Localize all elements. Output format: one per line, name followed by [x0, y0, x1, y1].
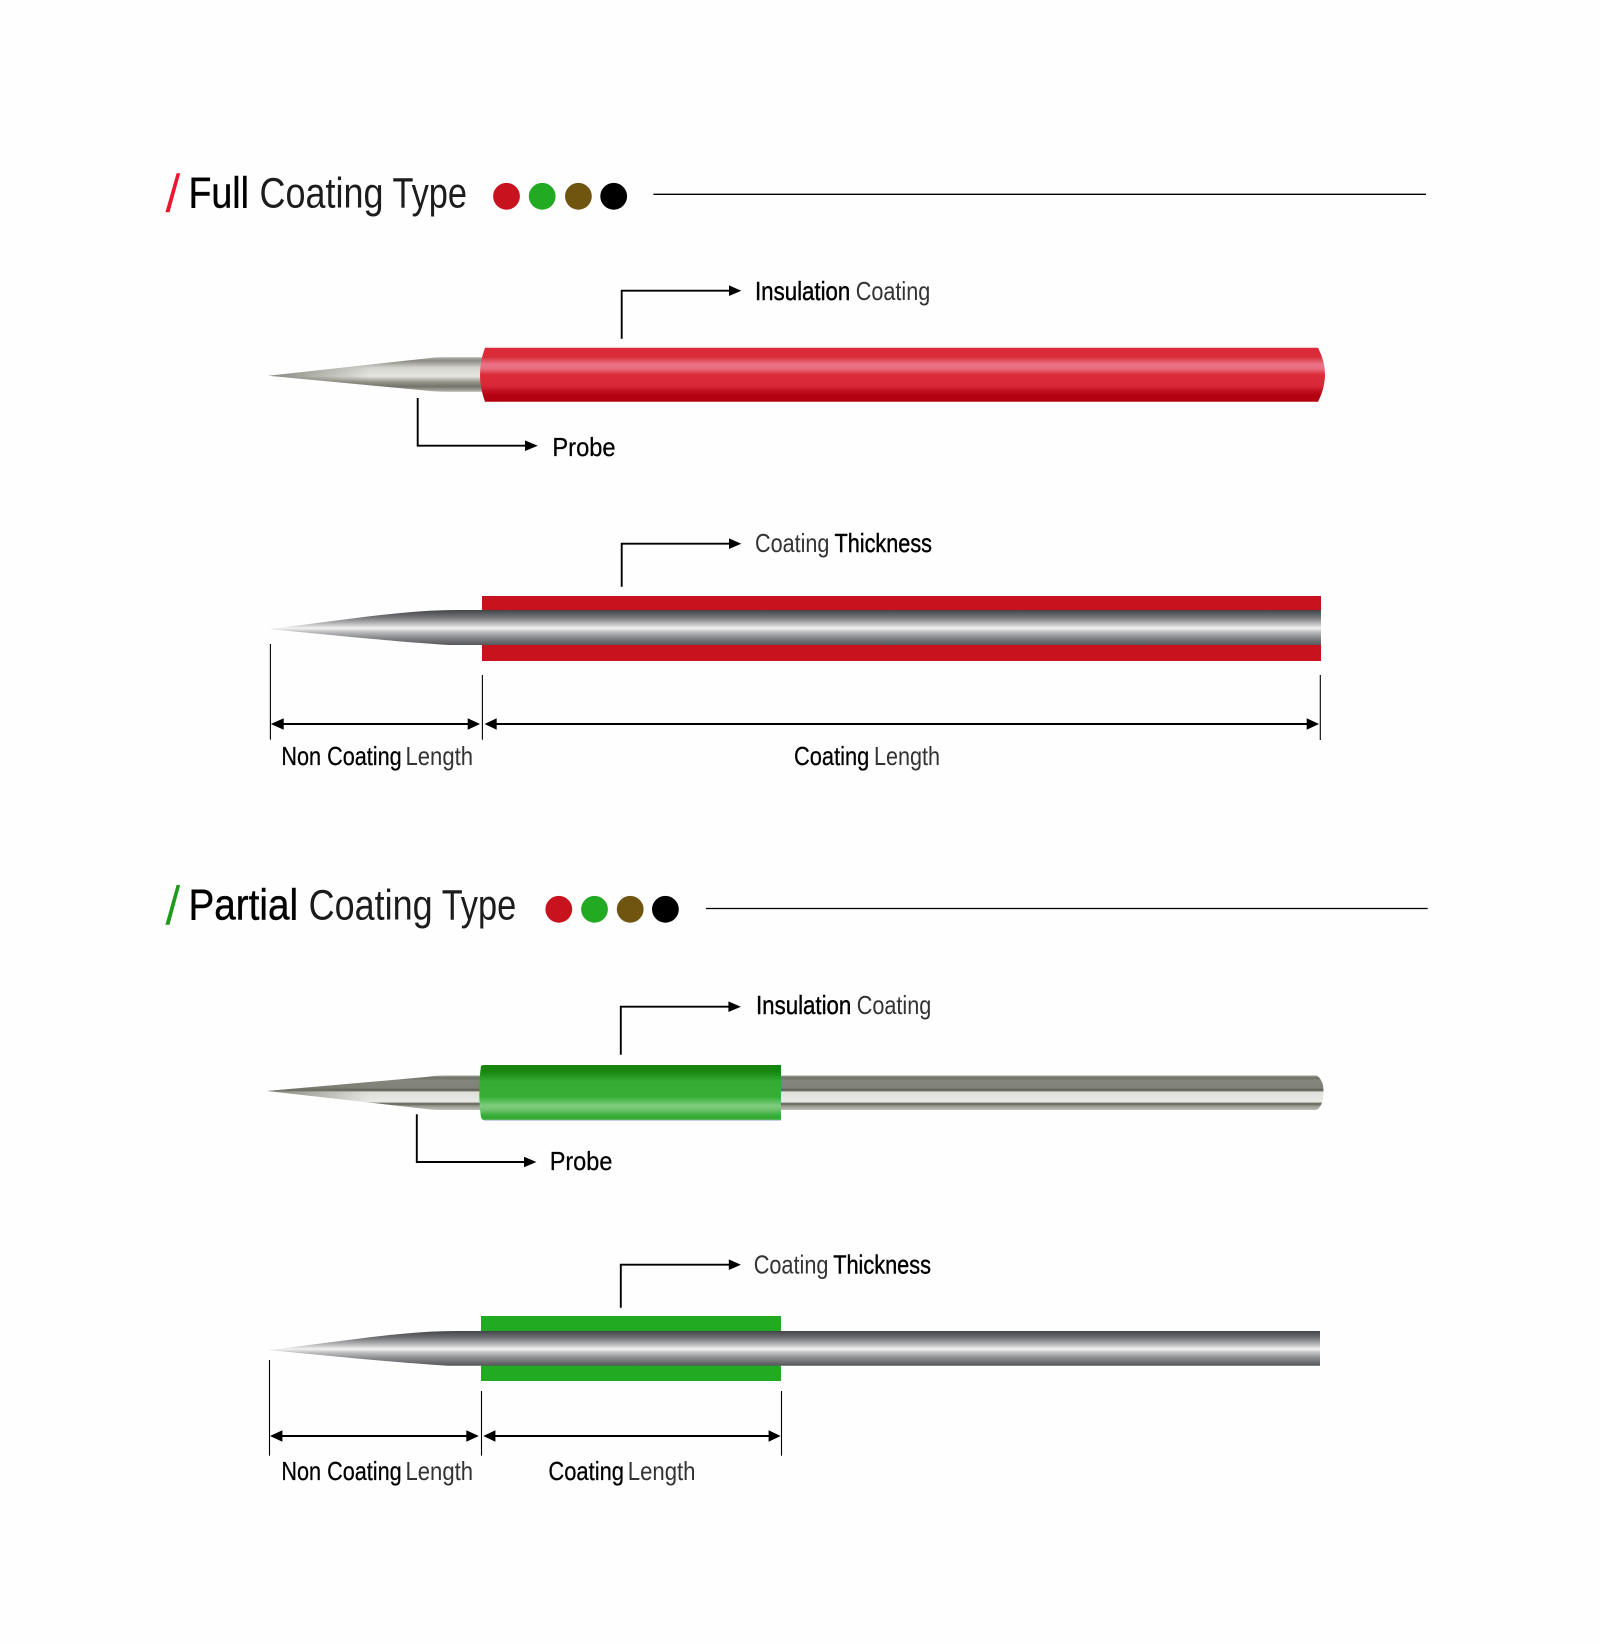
heading text: Full [188, 169, 249, 218]
label: coating length: Length [874, 741, 940, 771]
label: coating thickness: Thickness [834, 528, 932, 558]
label: insulation coating: Coating [856, 276, 930, 306]
label: coating length: Coating [548, 1456, 624, 1486]
steel probe core [268, 1331, 1320, 1366]
label: insulation coating [756, 990, 931, 1020]
label: coating thickness: Coating [755, 528, 829, 558]
dimension: non coating length [270, 1360, 482, 1486]
red slash [165, 173, 180, 212]
label: coating length [548, 1456, 696, 1486]
label: insulation coating: Insulation [756, 990, 851, 1020]
green slash [165, 885, 180, 925]
heading text: Type [392, 170, 467, 218]
dimension: coating length [485, 675, 1320, 771]
label: coating thickness: Thickness [833, 1250, 931, 1280]
heading text: Partial [188, 881, 298, 930]
heading: full coating type [165, 169, 467, 218]
dimension: coating length [483, 1391, 782, 1486]
label: coating length [794, 741, 940, 771]
green coating tube [479, 1065, 781, 1120]
heading text: Type [442, 882, 516, 930]
probe steel body [267, 1076, 1324, 1110]
dimension: non coating length [270, 644, 482, 771]
heading: partial coating type [165, 881, 516, 930]
section: partial coating type [165, 881, 1428, 1486]
heading text: Coating [309, 882, 433, 930]
heading text [188, 881, 516, 930]
insulated probe diagram [268, 348, 1325, 402]
label: coating length: Length [628, 1456, 696, 1486]
callout: coating thickness [621, 1250, 931, 1308]
label: non coating length: Non Coating [281, 741, 402, 771]
label: coating thickness: Coating [754, 1250, 828, 1280]
cross-section diagram [268, 1316, 1320, 1381]
red coating layer [482, 596, 1321, 661]
steel probe core [269, 610, 1321, 645]
label: non coating length: Length [406, 741, 473, 771]
label: insulation coating: Coating [857, 990, 931, 1020]
label: insulation coating [755, 276, 930, 306]
callout: insulation coating [622, 276, 930, 339]
label: coating thickness [755, 528, 932, 558]
heading text [188, 169, 467, 218]
label: non coating length: Length [406, 1456, 473, 1486]
label: insulation coating: Insulation [755, 276, 850, 306]
callout: insulation coating [621, 990, 931, 1055]
colour dots [545, 896, 679, 923]
cross-section diagram [269, 596, 1321, 661]
label: non coating length: Non Coating [281, 1456, 402, 1486]
callout: probe: Probe [552, 432, 616, 462]
partially insulated probe diagram [267, 1065, 1324, 1120]
callout: probe: Probe [550, 1146, 612, 1176]
label: coating length: Coating [794, 741, 869, 771]
section: full coating type [165, 169, 1426, 771]
heading text: Coating [260, 170, 384, 218]
green coating layer [481, 1316, 781, 1381]
callout: coating thickness [622, 528, 932, 587]
label: coating thickness [754, 1250, 931, 1280]
callout: probe [418, 398, 616, 462]
probe tip [268, 357, 490, 392]
colour dots [493, 183, 627, 210]
red coating tube [480, 348, 1325, 402]
callout: probe [417, 1114, 612, 1176]
